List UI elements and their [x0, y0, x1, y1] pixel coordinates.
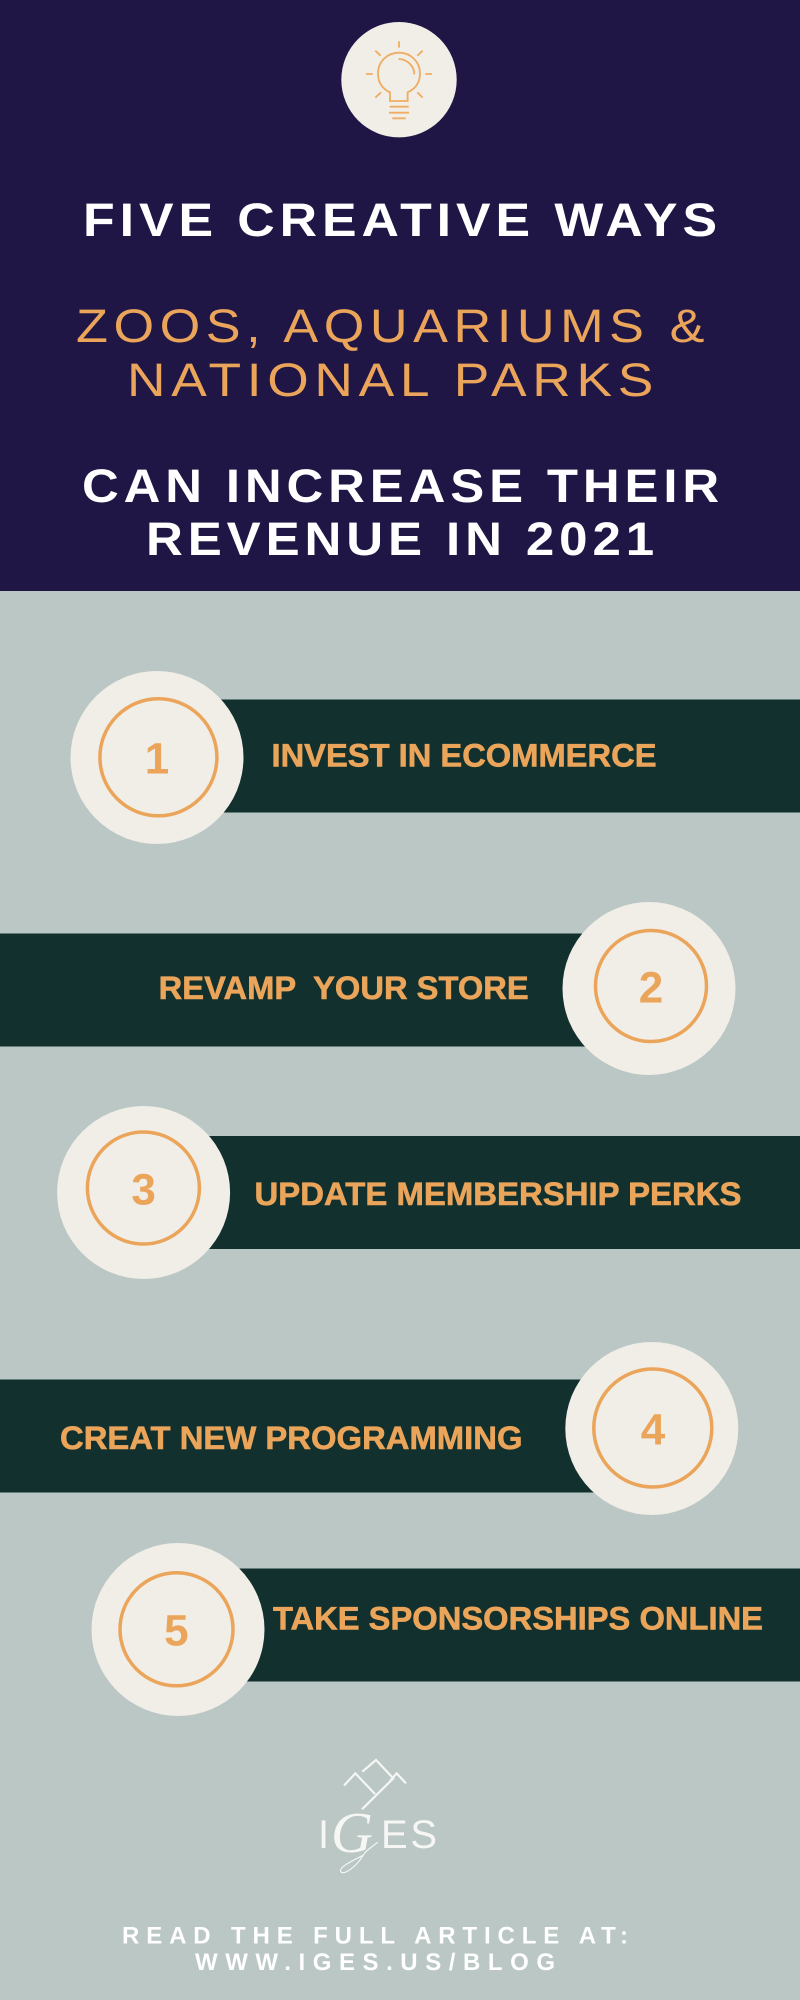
footer text: blog url: WWW.IGES.US/BLOG: [195, 1949, 555, 1976]
panel: step 5: TAKE SPONSORSHIPS ONLINE: [273, 1601, 763, 1637]
heading: national parks: NATIONAL PARKS: [127, 353, 659, 406]
footer text: read the full article: READ THE FULL ARTICLE AT:: [122, 1922, 628, 1949]
panel: step 2: 2: [639, 963, 663, 1012]
panel: step 1: INVEST IN ECOMMERCE: [272, 738, 656, 774]
panel: step 1: [70, 671, 800, 844]
icon: light bulb: [341, 22, 457, 137]
panel: step 4: [0, 1342, 738, 1515]
panel: step 2: [0, 902, 736, 1075]
logo: IGES: I: [318, 1813, 329, 1857]
panel: step 4: 4: [641, 1406, 666, 1455]
panel: header: [0, 0, 800, 591]
logo: IGES: G: [331, 1800, 373, 1865]
panel: step 3: UPDATE MEMBERSHIP PERKS: [254, 1176, 742, 1212]
panel: step 2: REVAMP YOUR STORE: [159, 970, 529, 1006]
panel: step 5: 5: [164, 1607, 189, 1656]
panel: step 5: [92, 1543, 800, 1716]
panel: step 4: CREAT NEW PROGRAMMING: [60, 1420, 522, 1456]
heading: zoos and aquariums: ZOOS, AQUARIUMS &: [76, 299, 710, 352]
panel: step 1: 1: [145, 734, 169, 783]
panel: step 3: [57, 1106, 800, 1279]
heading: five creative ways: FIVE CREATIVE WAYS: [83, 193, 722, 246]
heading: revenue in 2021: REVENUE IN 2021: [146, 512, 659, 565]
panel: step 3: 3: [131, 1166, 156, 1215]
logo: IGES: [318, 1760, 437, 1873]
heading: can increase their: CAN INCREASE THEIR: [82, 459, 724, 512]
logo: IGES: ES: [381, 1813, 437, 1857]
